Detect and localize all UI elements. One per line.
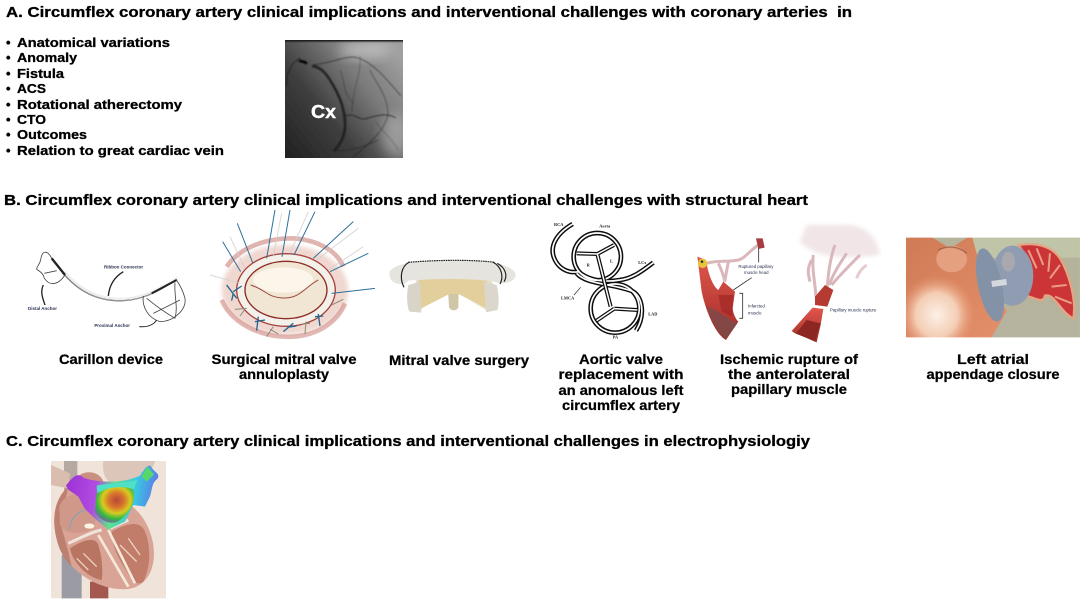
caption: surgical mitral valve annuloplasty xyxy=(212,352,357,382)
image: left atrial appendage closure xyxy=(906,238,1080,338)
bullet list: coronary topics: Anatomical variations xyxy=(17,35,170,50)
illustration: heart with electroanatomic map xyxy=(51,461,166,598)
bullet list: coronary topics: • xyxy=(6,97,11,112)
diagram: aortic valve with anomalous left circumflex artery: Aorta xyxy=(599,223,611,228)
caption: aortic valve replacement: an anomalous left xyxy=(558,383,684,398)
illustration: ischemic rupture of papillary muscle xyxy=(697,225,880,342)
illustration: Carillon device: Proximal Anchor xyxy=(94,323,130,328)
bullet list: coronary topics: • xyxy=(6,66,11,81)
caption: surgical mitral valve annuloplasty: annuloplasty xyxy=(239,367,330,382)
caption: Carillon device: Carillon device xyxy=(59,352,164,367)
bullet list: coronary topics: CTO xyxy=(17,112,46,127)
caption: aortic valve replacement: Aortic valve xyxy=(579,352,664,367)
diagram: aortic valve with anomalous left circumflex artery: R xyxy=(587,263,591,268)
bullet list: coronary topics: Relation to great cardiac vein xyxy=(17,143,224,158)
caption: ischemic rupture of the anterolateral papillary muscle: papillary muscle xyxy=(731,382,848,397)
bullet list: coronary topics: • xyxy=(6,127,11,142)
caption: ischemic rupture of the anterolateral papillary muscle: the anterolateral xyxy=(728,367,850,382)
diagram: aortic valve with anomalous left circumflex artery: LAD xyxy=(648,311,657,316)
caption: ischemic rupture of the anterolateral papillary muscle: Ischemic rupture of xyxy=(720,352,859,367)
heading B: B. Circumflex coronary artery clinical implications and interventional challenges with structural heart xyxy=(4,193,808,209)
heading C: C. Circumflex coronary artery clinical implications and interventional challenges in electrophysiologiy xyxy=(6,434,810,450)
diagram: aortic valve with anomalous left circumflex artery: RCA xyxy=(554,222,564,227)
caption: left atrial appendage closure: Left atrial xyxy=(957,352,1029,367)
illustration: mitral valve surgery ring xyxy=(389,260,516,313)
bullet list: coronary topics: • xyxy=(6,50,11,65)
diagram: aortic valve with anomalous left circumflex artery xyxy=(553,222,657,340)
illustration: ischemic rupture of papillary muscle: muscle head xyxy=(744,270,769,275)
diagram: aortic valve with anomalous left circumflex artery: L xyxy=(610,259,613,264)
caption: left atrial appendage closure: appendage closure xyxy=(926,367,1060,382)
caption: ischemic rupture of the anterolateral papillary muscle xyxy=(720,352,859,397)
bullet list: coronary topics: • xyxy=(6,81,11,96)
illustration: Carillon device: Ribbon Connector xyxy=(104,265,143,270)
bullet list: coronary topics xyxy=(6,35,224,158)
illustration: Carillon device: Distal Anchor xyxy=(28,306,57,311)
illustration: Carillon device xyxy=(28,252,185,328)
image: coronary angiogram with Cx label xyxy=(285,40,403,158)
illustration: ischemic rupture of papillary muscle: Ruptured papillary xyxy=(738,264,774,269)
label: Cx: Cx xyxy=(311,102,336,122)
bullet list: coronary topics: • xyxy=(6,35,11,50)
bullet list: coronary topics: Fistula xyxy=(17,66,65,81)
caption: aortic valve replacement xyxy=(558,352,684,413)
caption: mitral valve surgery: Mitral valve surgery xyxy=(389,353,530,368)
bullet list: coronary topics: • xyxy=(6,143,11,158)
bullet list: coronary topics: Rotational atherectomy xyxy=(17,97,183,112)
illustration: surgical mitral valve annuloplasty xyxy=(210,210,375,337)
bullet list: coronary topics: Outcomes xyxy=(17,127,87,142)
caption: aortic valve replacement: circumflex artery xyxy=(562,398,681,413)
illustration: ischemic rupture of papillary muscle: Papillary muscle rupture xyxy=(830,307,877,312)
diagram: aortic valve with anomalous left circumflex artery: PA xyxy=(613,335,619,340)
illustration: ischemic rupture of papillary muscle: Infarcted xyxy=(748,304,765,309)
caption: surgical mitral valve annuloplasty: Surgical mitral valve xyxy=(212,352,357,367)
illustration: ischemic rupture of papillary muscle: muscle xyxy=(748,310,762,315)
bullet list: coronary topics: ACS xyxy=(17,81,46,96)
bullet list: coronary topics: Anomaly xyxy=(17,50,78,65)
caption: left atrial appendage closure xyxy=(926,352,1060,382)
bullet list: coronary topics: • xyxy=(6,112,11,127)
caption: aortic valve replacement: replacement with xyxy=(558,367,684,382)
diagram: aortic valve with anomalous left circumflex artery: LCx xyxy=(638,260,647,265)
diagram: aortic valve with anomalous left circumflex artery: LMCA xyxy=(561,295,575,300)
heading A: A. Circumflex coronary artery clinical implications and interventional challenges with coronary arteries in xyxy=(6,5,852,21)
